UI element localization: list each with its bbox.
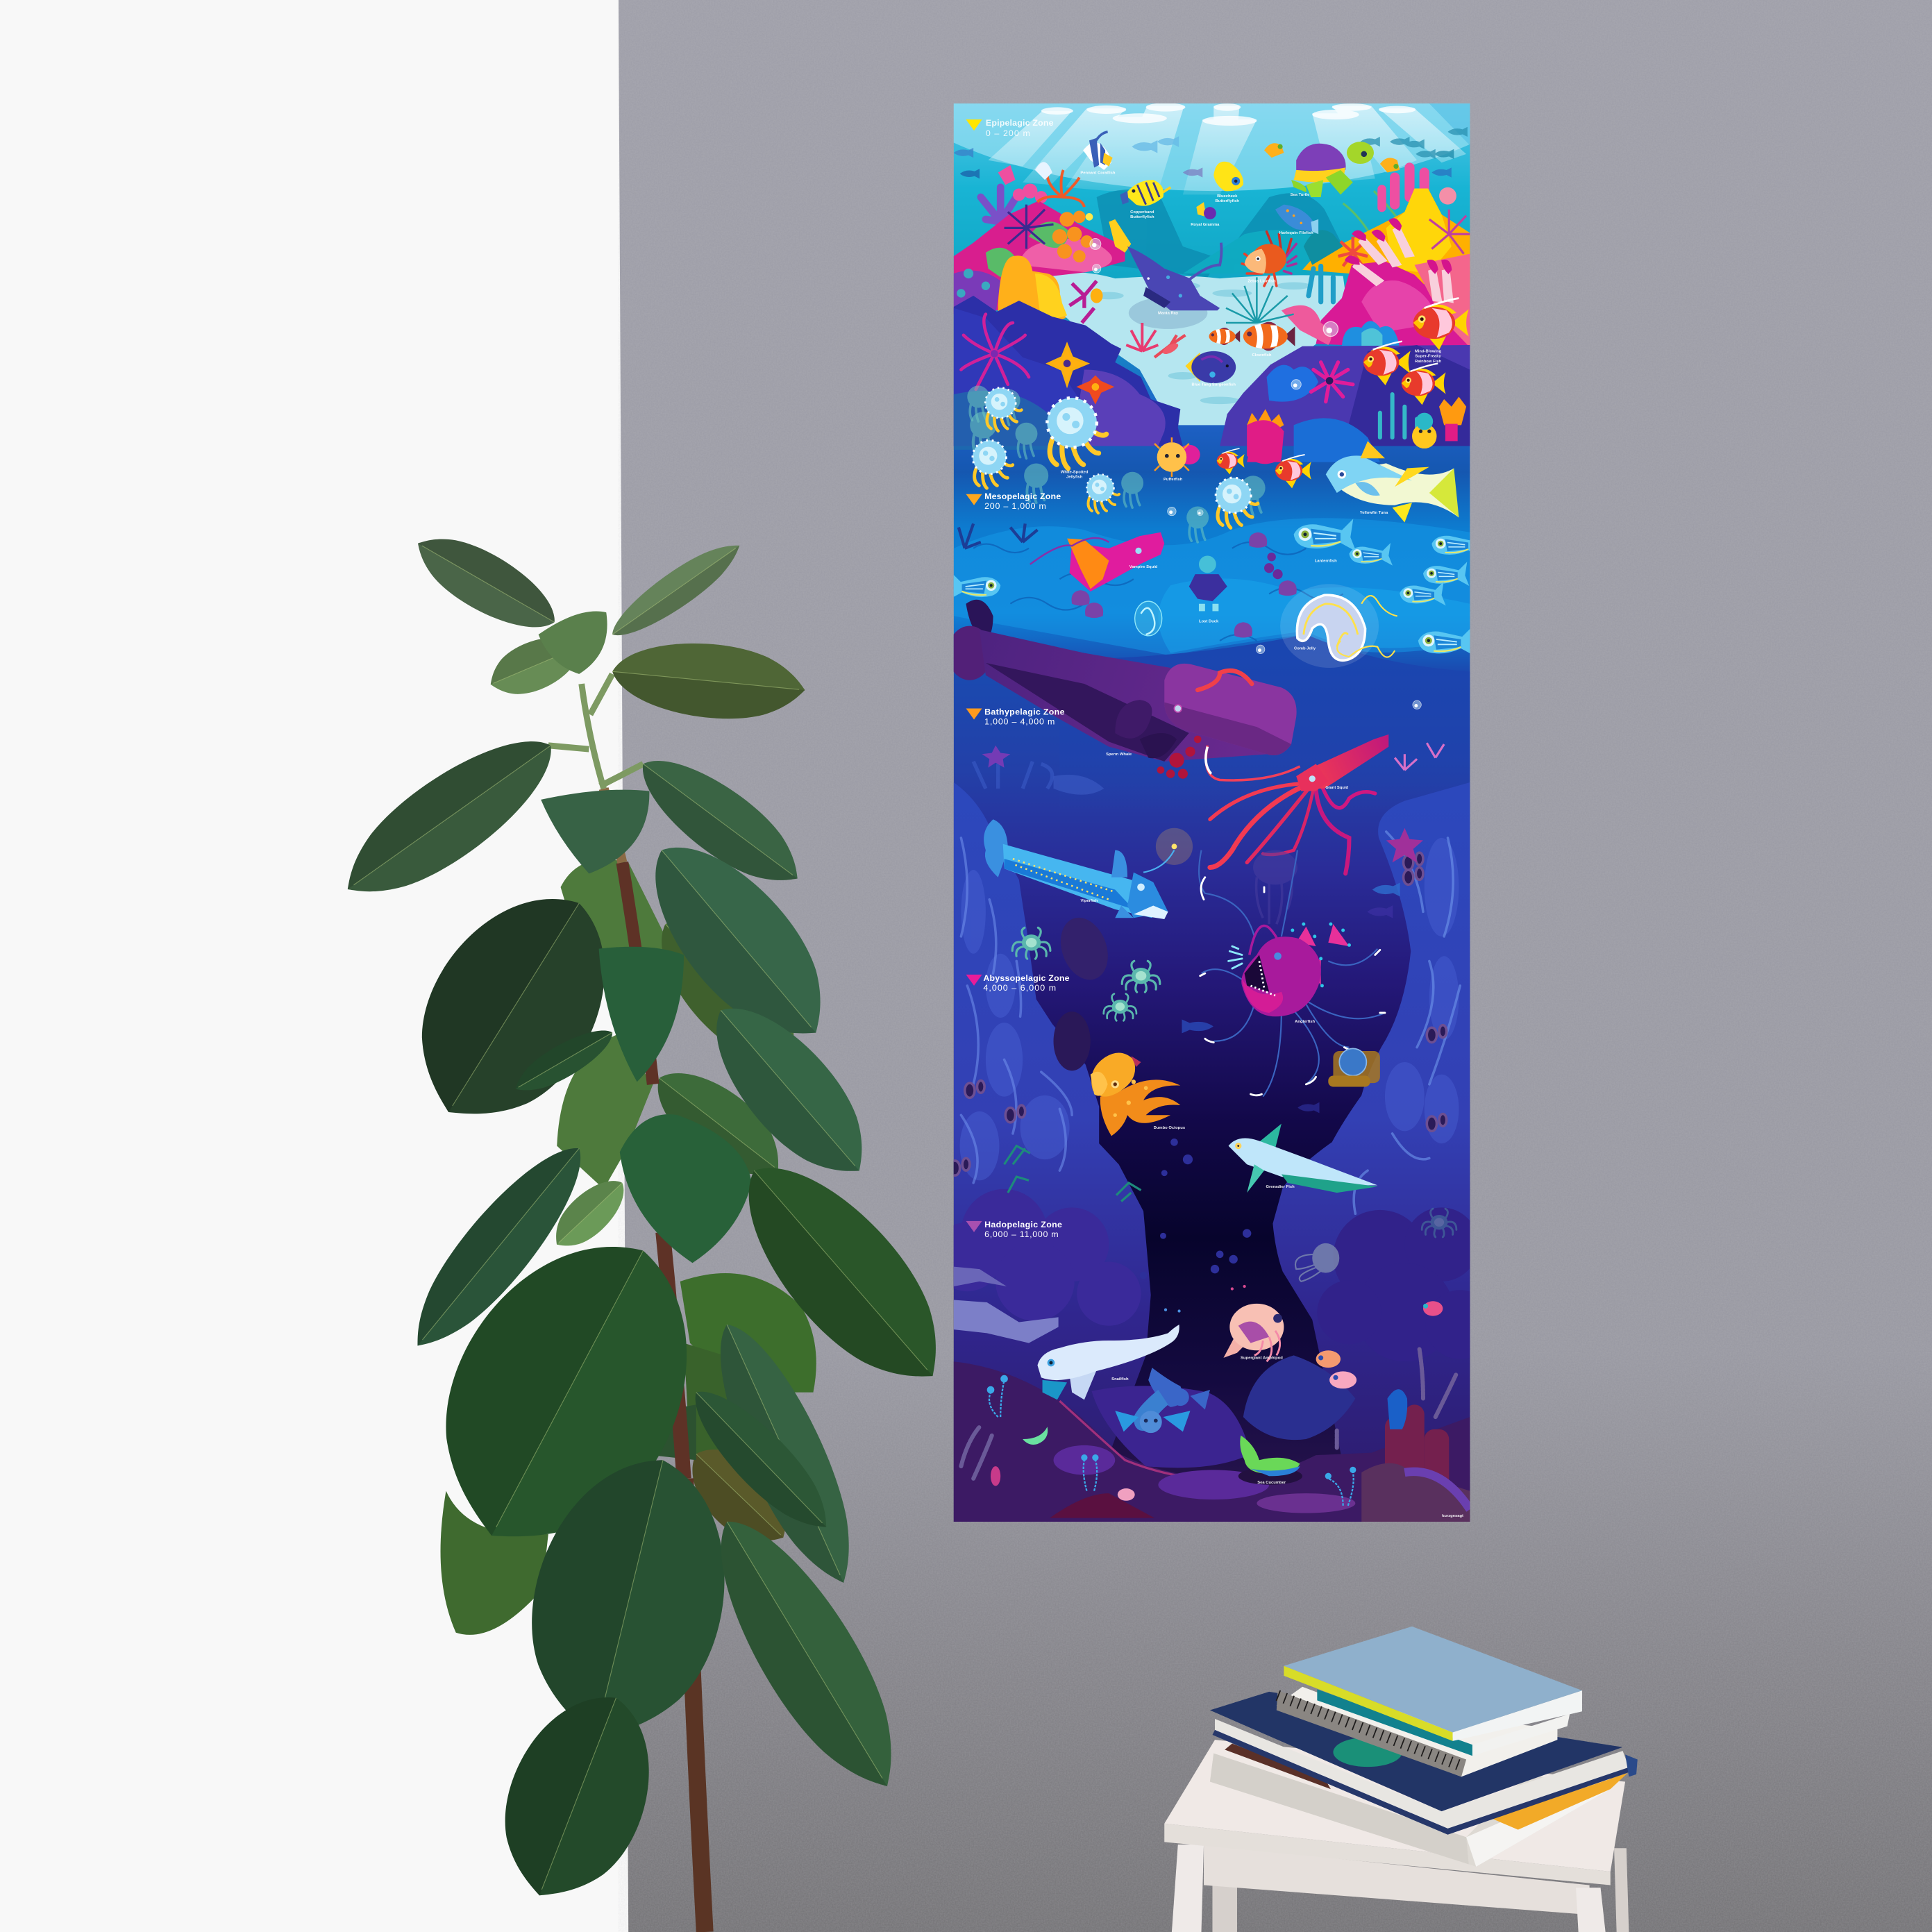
poster: ocean depth zones [954, 103, 1470, 1522]
bottom white book [1210, 1743, 1611, 1867]
blue mid band rocks [1294, 418, 1380, 462]
species name labels: Jellyfish [1066, 476, 1083, 480]
pink tube coral [1377, 162, 1429, 212]
species name labels: Super-Freaky [1415, 355, 1441, 359]
whale head [1164, 664, 1297, 755]
magenta reef mound [954, 201, 1125, 314]
whale eye [1174, 705, 1182, 712]
squid tentacles [1210, 784, 1375, 873]
indigo reef foreground [954, 296, 1183, 446]
right anemone orange [1439, 397, 1466, 425]
species name labels: Snailfish [1111, 1377, 1129, 1381]
crabs [1012, 927, 1160, 1020]
pink starfish [1386, 828, 1423, 862]
zebra lionfish [1242, 232, 1296, 286]
purple branching coral [981, 187, 1018, 221]
blue polyp flowers [989, 1380, 1354, 1506]
hadopelagic zone label [966, 1220, 1062, 1239]
species name labels [1061, 171, 1463, 1518]
blue blob [1388, 1389, 1407, 1429]
bathypelagic zone label: Bathypelagic Zone [984, 707, 1065, 716]
tiny amphipods on floor [991, 1466, 1135, 1501]
teal coral [1380, 394, 1417, 437]
dim fish silhouette [1054, 775, 1104, 795]
fish and creatures: epipelagic [1035, 132, 1469, 448]
white-spotted jellyfish [973, 387, 1258, 528]
sunlit surface with light rays [954, 103, 1470, 194]
striped tube worms [961, 1349, 1456, 1479]
magenta branching coral [1070, 281, 1097, 323]
bathypelagic decorations [973, 743, 1444, 795]
sea turtle [1291, 142, 1374, 197]
whale body [980, 630, 1269, 762]
back reef silhouettes [1097, 190, 1343, 277]
yellow red anemone [1109, 219, 1131, 253]
hadopelagic zone label: Hadopelagic Zone [984, 1220, 1062, 1229]
blood cloud [1157, 736, 1202, 779]
dim corals left [973, 762, 1052, 789]
seashells [1071, 532, 1297, 637]
species name labels: Supergiant Amphipod [1241, 1356, 1283, 1361]
stool back legs [1212, 1848, 1629, 1932]
species name labels: Bluecheek [1217, 194, 1238, 199]
green coral [986, 221, 1070, 277]
supergiant amphipod [1223, 1304, 1284, 1361]
viperfish lure [1143, 828, 1193, 873]
stool front legs [1172, 1845, 1606, 1932]
red coral mounds right [1361, 1404, 1470, 1522]
pink corals right [1395, 743, 1444, 770]
blue coral [1342, 321, 1400, 348]
small yellow fish group [1264, 143, 1400, 172]
diver mask coral creature [1091, 288, 1103, 303]
sea anemone teal [1226, 277, 1294, 323]
snailfish [1037, 1325, 1179, 1400]
species name labels: Butterflyfish [1130, 215, 1154, 219]
species name labels: Mind-Blowing [1415, 350, 1442, 354]
stool top surface [1164, 1740, 1625, 1872]
zone labels [966, 118, 1070, 1239]
mesopelagic sea hills [954, 518, 1470, 655]
red coral and lobster [1126, 323, 1185, 358]
orange sea anemone [1037, 170, 1084, 207]
ghost snailfish left [954, 1267, 1059, 1343]
dumbo octopus [1091, 1053, 1180, 1136]
orange star corals [1048, 345, 1111, 402]
sea urchin [1005, 205, 1054, 249]
magenta reef mound [1316, 261, 1470, 351]
bubbles [1090, 238, 1338, 389]
mesopelagic zone label [966, 492, 1061, 511]
small green cucumber [1023, 1427, 1048, 1445]
purple anemone cluster [1264, 553, 1283, 579]
squid mantle [1304, 734, 1388, 789]
pale sandy seabed [1023, 272, 1349, 425]
viperfish tail fins [984, 819, 1008, 877]
pink coral [998, 165, 1048, 203]
mesopelagic zone label: 200 – 1,000 m [984, 501, 1046, 511]
pufferfish [1154, 437, 1200, 477]
deep bubbles [1140, 1139, 1251, 1279]
hadal floor [954, 1349, 1470, 1522]
dim starfish [982, 746, 1010, 768]
indigo reef foreground [1220, 345, 1470, 446]
species name labels: Pufferfish [1164, 478, 1183, 482]
grenadier fish [1229, 1124, 1377, 1193]
jellyfish swarm [967, 386, 1266, 542]
cave sponges left [950, 1081, 1025, 1175]
bubble jelly [1135, 601, 1162, 636]
grey felt wall [619, 0, 1932, 1932]
species name labels: kurzgesagt [1442, 1514, 1463, 1518]
bathypelagic zone label: 1,000 – 4,000 m [984, 717, 1055, 727]
harlequin filefish [1275, 205, 1318, 234]
species name labels: Zebra Lionfish [1248, 279, 1276, 283]
grey jellyfish [1295, 1243, 1339, 1282]
rainbow fish group [1363, 299, 1469, 405]
orange anemone right [1429, 210, 1470, 254]
species name labels: Lost Duck [1199, 619, 1219, 623]
hadal blue fish pair [1115, 1368, 1210, 1433]
bluecheek butterflyfish [1213, 162, 1243, 191]
green kelp [1343, 191, 1436, 277]
spiral notebook [1277, 1687, 1557, 1776]
ocean water gradient [954, 103, 1470, 1522]
mesopelagic creatures [949, 507, 1481, 709]
species name labels: Manta Ray [1158, 312, 1179, 316]
ghost jellyfish [1253, 850, 1297, 924]
blue tang surgeonfish [1185, 351, 1236, 383]
species name labels: Dumbo Octopus [1154, 1126, 1186, 1130]
abyss right cave wall [1272, 782, 1495, 1522]
green seaweed [1005, 1146, 1141, 1202]
dim crab right [1422, 1209, 1456, 1237]
striped tube anemones [1344, 216, 1462, 303]
dark red rock [1050, 1493, 1154, 1518]
small amphipods [1316, 1301, 1443, 1388]
purple seafloor worms [1404, 1472, 1470, 1509]
small clown fish [1217, 448, 1311, 488]
rubber plant [324, 519, 974, 1932]
pufferfish and tuna group [1154, 420, 1459, 523]
cave ledge blobs [933, 1189, 1141, 1326]
hidden eyes in the dark [1164, 1285, 1246, 1313]
epipelagic zone label: Epipelagic Zone [986, 118, 1054, 128]
species name labels: Sea Cucumber [1257, 1481, 1286, 1485]
manta ray [1127, 243, 1221, 310]
white tentacle [1206, 746, 1300, 780]
stack of books [1210, 1627, 1638, 1867]
magenta anemone [961, 314, 1029, 389]
hadopelagic zone label: 6,000 – 11,000 m [984, 1229, 1059, 1239]
orange bubble coral [1052, 211, 1093, 262]
yellowfin tuna [1326, 441, 1459, 523]
epipelagic zone label: 0 – 200 m [986, 128, 1030, 138]
epipelagic zone label [966, 118, 1054, 138]
lost duck diver [1189, 555, 1227, 611]
pink coral blob [1019, 239, 1112, 272]
blue seaweed coral [1309, 266, 1333, 302]
species name labels: Grenadier Fish [1266, 1185, 1295, 1189]
magenta anemone [1247, 420, 1284, 464]
lanternfish shoal [949, 519, 1481, 656]
dim jellyfish [967, 386, 1266, 542]
species name labels: Rainbow Fish [1415, 360, 1441, 364]
species name labels: Royal Gramma [1191, 223, 1220, 227]
species name labels: Viperfish [1081, 899, 1098, 903]
cave blobs right [1317, 1207, 1495, 1361]
small bannerfish [1035, 162, 1052, 180]
orange tube anemone [1247, 409, 1284, 462]
magenta flower anemone [1311, 362, 1353, 402]
mesopelagic bubbles [1168, 507, 1421, 709]
species name labels: Sperm Whale [1106, 753, 1132, 757]
left coral reef [954, 165, 1183, 450]
anglerfish [1199, 850, 1385, 1097]
yellow orange mound [1302, 189, 1470, 291]
navy hardcover book [1210, 1692, 1638, 1835]
pennant coralfish [1083, 132, 1113, 170]
species name labels: Lanternfish [1315, 559, 1337, 563]
yellow puffer blue head [1412, 413, 1437, 448]
species name labels: Harlequin Filefish [1279, 231, 1313, 235]
abyssopelagic zone label [966, 973, 1070, 993]
comb jelly [1280, 584, 1397, 668]
viperfish fins and head [1111, 850, 1134, 918]
species name labels: White-Spotted [1061, 471, 1089, 475]
abyssopelagic zone label: Abyssopelagic Zone [983, 973, 1070, 983]
stool apron [1204, 1845, 1590, 1915]
unicorn pink creature [1439, 187, 1456, 205]
species name labels: Blue Tang Surgeonfish [1191, 383, 1236, 387]
deep whale-zone ledge [1059, 635, 1470, 813]
teal lower reef shade [954, 391, 1059, 450]
anglerfish tendrils [1199, 850, 1385, 1097]
abyssopelagic zone label: 4,000 – 6,000 m [983, 983, 1056, 993]
species name labels: Butterflyfish [1216, 199, 1239, 203]
squid tentacle on whale [1198, 671, 1252, 690]
vampire squid [1030, 532, 1164, 591]
dim anglerfish silhouettes [1052, 911, 1116, 1070]
species name labels: Clownfish [1252, 353, 1272, 358]
species name labels: Anglerfish [1295, 1020, 1315, 1024]
cave sponges right [1404, 852, 1447, 1131]
submersible [1328, 1048, 1380, 1086]
whale flippers [1115, 700, 1152, 739]
abyss left cave wall [933, 782, 1151, 1522]
left dark corals mesopelagic [959, 523, 1037, 548]
dim fish in the deep [1182, 883, 1400, 1113]
pink slug rock [1282, 305, 1332, 345]
plant leaves [324, 519, 974, 1920]
red flower coral [1338, 237, 1368, 266]
squid head [1296, 764, 1328, 791]
clownfish pair [1209, 322, 1295, 351]
purple lower reef shelf [954, 271, 1000, 314]
bathypelagic zone label [966, 707, 1065, 727]
orange mound [998, 255, 1066, 330]
anglerfish fan fins [1296, 924, 1349, 986]
mesopelagic zone label: Mesopelagic Zone [984, 492, 1061, 501]
sea cucumber [1238, 1436, 1302, 1485]
species name labels: Sea Turtle [1291, 193, 1310, 197]
stool top edge [1164, 1824, 1611, 1885]
top blue book [1284, 1627, 1582, 1741]
royal gramma [1196, 202, 1216, 219]
anglerfish body [1241, 936, 1321, 1016]
viperfish body [1003, 844, 1156, 918]
species name labels: Giant Squid [1325, 786, 1349, 790]
plant stem [548, 674, 705, 1932]
blue polyps [957, 269, 990, 298]
species name labels: Copperband [1130, 210, 1154, 215]
sperm whale [948, 600, 1300, 780]
anglerfish lure [1250, 925, 1279, 955]
orange book [1492, 1773, 1628, 1830]
species name labels: Yellowfin Tuna [1360, 511, 1388, 515]
species name labels: Vampire Squid [1129, 565, 1158, 569]
white stool [1164, 1740, 1629, 1932]
viperfish [984, 819, 1193, 919]
giant squid [1210, 734, 1388, 873]
right coral reef [1220, 162, 1470, 462]
copperband butterflyfish [1120, 180, 1170, 206]
small background fish [954, 127, 1468, 178]
species name labels: Pennant Coralfish [1080, 171, 1116, 175]
back olive leaves [441, 859, 821, 1635]
teal book [1317, 1689, 1570, 1756]
teal coral behind mound [1304, 230, 1343, 265]
species name labels: Comb Jelly [1294, 646, 1316, 650]
whale tail fluke [948, 600, 993, 680]
